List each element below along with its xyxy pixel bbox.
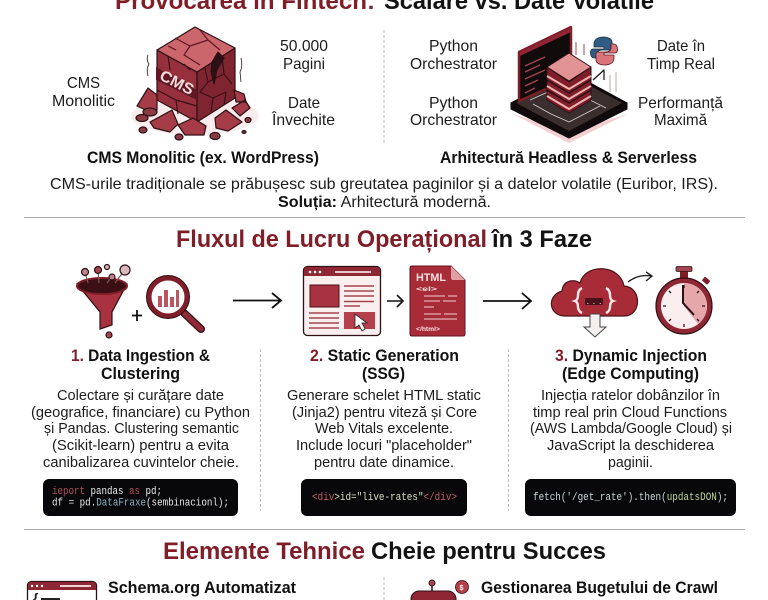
icon: crumbling CMS cube <box>131 27 259 140</box>
icon: crumbling CMS cube: CMS <box>157 67 196 99</box>
code: python snippet: df = pd.DataFraxe(sembinacionl); <box>52 498 229 510</box>
text: phase 1 description: și Pandas. Clustering semantic <box>44 420 239 437</box>
title: technical elements section: Elemente Tehnice <box>163 538 365 565</box>
label: Performanță Maximă: Performanță <box>638 95 723 112</box>
label: Performanță Maximă: Maximă <box>654 112 707 129</box>
label: 50.000 Pagini: Pagini <box>283 56 325 73</box>
icon: HTML file <box>410 266 465 336</box>
label: Python Orchestrator bottom: Orchestrator <box>410 112 498 129</box>
label: Python Orchestrator top: Orchestrator <box>410 56 498 73</box>
label: Performanță Maximă <box>638 95 723 129</box>
label: Date Învechite <box>271 95 335 129</box>
panel: phase 1 <box>31 347 250 516</box>
icon: HTML file: HTML <box>416 272 446 284</box>
text: phase 3 description: paginii. <box>608 454 653 471</box>
text: phase 3 description: timp real prin Cloud Functions <box>533 404 727 421</box>
text: phase 2 description: Include locuri "placeholder" <box>296 437 472 454</box>
heading: phase 1: 1. Data Ingestion & <box>71 347 210 365</box>
label: Python Orchestrator bottom <box>410 95 498 129</box>
heading: phase 2: (SSG) <box>362 365 405 383</box>
icon: robot <box>411 580 468 600</box>
label: Date Învechite: Învechite <box>271 110 335 129</box>
arrow: phase 2 to phase 3 <box>483 293 531 309</box>
text: challenge summary: CMS-urile tradiționale se prăbușesc sub greutatea paginilor și a datelor volatile (Euribor, IRS). <box>50 176 718 193</box>
icon: magnifier with chart <box>146 276 201 329</box>
title: workflow section: în 3 Faze <box>491 226 592 253</box>
icon: cloud with code: ... <box>587 300 601 306</box>
icon: browser page <box>304 266 380 336</box>
icon: stopwatch <box>656 266 712 334</box>
heading: Schema.org: Schema.org Automatizat <box>108 579 296 597</box>
text: phase 2 description: Generare schelet HTML static <box>287 387 481 404</box>
text: phase 3 description <box>530 387 732 471</box>
text: phase 2 description: Web Vitals excelente. <box>315 420 453 437</box>
code: python snippet <box>43 479 238 516</box>
label: Python Orchestrator bottom: Python <box>429 95 478 112</box>
icon: schema browser <box>28 582 96 600</box>
heading: phase 3 <box>555 347 707 383</box>
label: Python Orchestrator top <box>410 38 498 73</box>
text: phase 3 description: (AWS Lambda/Google Cloud) și <box>530 420 732 437</box>
arrow: cloud to stopwatch <box>628 272 652 282</box>
code: fetch snippet <box>525 479 736 516</box>
text: phase 3 description: Injecția ratelor dobânzilor în <box>541 387 720 404</box>
code: fetch snippet: fetch('/get_rate').then(updatsDON); <box>533 492 728 504</box>
text: phase 1 description: Colectare și curățare date <box>57 387 224 404</box>
label: Date în Timp Real <box>647 38 715 73</box>
title: technical elements section: Cheie pentru Succes <box>371 538 606 565</box>
heading: phase 3: 3. Dynamic Injection <box>555 347 707 365</box>
icon: cloud with code <box>551 269 638 337</box>
label: 50.000 Pagini <box>280 38 328 73</box>
text: challenge summary: Soluția: Arhitectură modernă. <box>278 194 491 211</box>
label: CMS Monolitic <box>52 75 115 110</box>
label: Date în Timp Real: Timp Real <box>647 56 715 73</box>
code: html placeholder: <div>id="live-rates"</div> <box>312 492 457 504</box>
label: CMS Monolitic: CMS <box>67 75 100 92</box>
label: CMS Monolitic: Monolitic <box>52 93 115 110</box>
label: Date în Timp Real: Date în <box>657 38 705 55</box>
icon: serverless stack <box>511 27 627 143</box>
code: python snippet: ieport pandas as pd; <box>52 486 162 498</box>
text: challenge summary <box>50 176 718 211</box>
panel: phase 2 <box>287 347 481 516</box>
title: challenge section <box>115 0 654 15</box>
code: html placeholder <box>301 479 467 516</box>
panel: phase 3 <box>525 347 736 516</box>
heading: phase 1 <box>71 347 210 383</box>
title: technical elements section <box>163 538 606 565</box>
heading: phase 2: 2. Static Generation <box>310 347 459 365</box>
subtitle: CMS Monolitic: CMS Monolitic (ex. WordPress) <box>87 149 319 167</box>
icon: HTML file: </html> <box>416 326 440 333</box>
heading: phase 1: Clustering <box>101 365 180 383</box>
arrow: phase 1 to phase 2 <box>233 293 281 308</box>
icon: funnel <box>77 264 130 338</box>
subtitle: headless architecture: Arhitectură Headless & Serverless <box>440 149 697 167</box>
text: phase 1 description <box>31 387 250 471</box>
text: phase 2 description: (Jinja2) pentru viteză și Core <box>292 404 477 421</box>
text: phase 2 description <box>287 387 481 471</box>
arrow: browser to html <box>387 295 403 307</box>
text: phase 2 description: pentru date dinamice. <box>314 454 454 471</box>
icon: plus <box>132 310 142 321</box>
text: phase 3 description: JavaScript la deschiderea <box>547 437 715 454</box>
heading: crawl budget: Gestionarea Bugetului de Crawl <box>481 579 718 597</box>
text: phase 1 description: (Scikit-learn) pentru a evita <box>52 437 230 454</box>
text: phase 1 description: canibalizarea cuvintelor cheie. <box>43 454 239 471</box>
label: Python Orchestrator top: Python <box>429 38 478 55</box>
title: workflow section: Fluxul de Lucru Operațional <box>176 226 487 253</box>
label: Date Învechite: Date <box>288 95 320 112</box>
label: 50.000 Pagini: 50.000 <box>280 38 328 55</box>
heading: phase 3: (Edge Computing) <box>562 365 699 383</box>
icon: HTML file: <el> <box>416 286 437 293</box>
text: phase 1 description: (geografice, financiare) cu Python <box>31 404 250 421</box>
heading: phase 2 <box>310 347 459 383</box>
icon: robot: $ <box>460 585 464 592</box>
